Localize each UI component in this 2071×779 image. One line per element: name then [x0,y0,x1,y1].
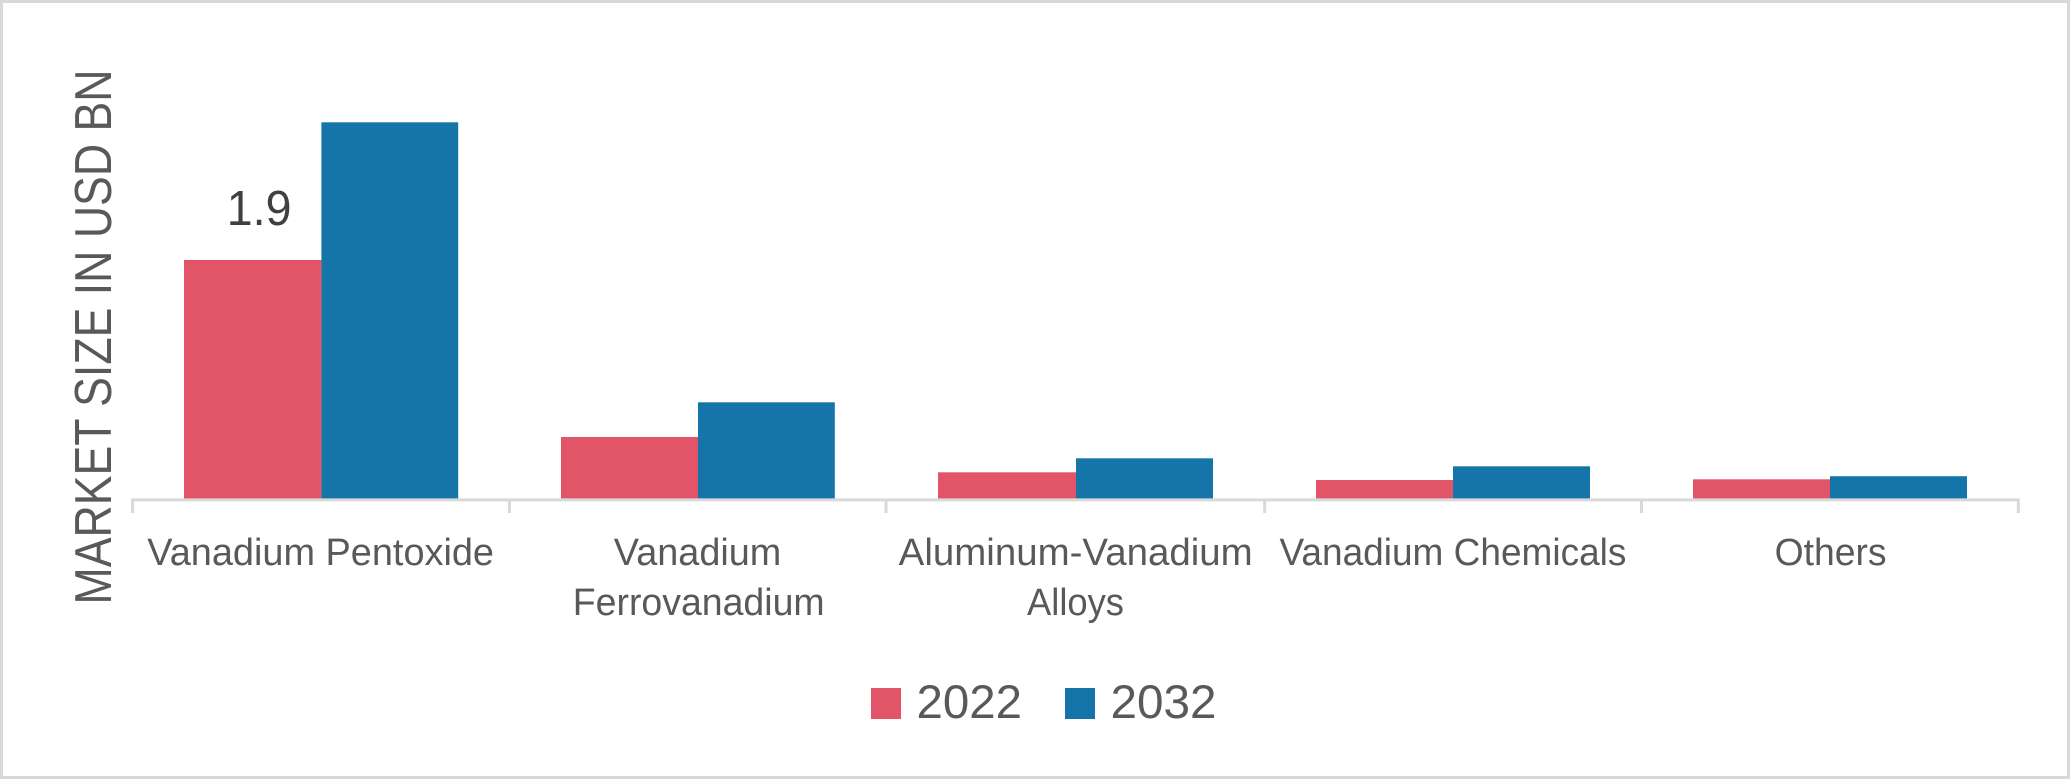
bar chart [133,122,2018,513]
label: Aluminum-Vanadium Alloys: Aluminum-Vanadium [899,532,1253,574]
data label: 1.9 [227,182,292,236]
bars: Aluminum-Vanadium Alloys [938,458,1213,499]
category labels [147,532,1887,624]
legend item: 2022 [871,675,1022,728]
label: Vanadium Ferrovanadium: Ferrovanadium [573,582,825,624]
bars: Others [1693,476,1967,499]
bars: Vanadium Pentoxide [184,122,458,499]
label: Vanadium Ferrovanadium [573,532,825,624]
legend item: 2022: 2022 [916,675,1022,728]
legend item: 2032 [1065,675,1216,728]
label: Vanadium Ferrovanadium: Vanadium [614,532,781,574]
bars: Vanadium Chemicals [1316,466,1590,499]
x-axis line and ticks [133,500,2018,513]
legend [871,675,1216,728]
label: Vanadium Chemicals: Vanadium Chemicals [1280,532,1626,574]
label: Aluminum-Vanadium Alloys [899,532,1253,624]
legend item: 2032: 2032 [1110,675,1216,728]
label: Vanadium Pentoxide: Vanadium Pentoxide [147,532,494,574]
label: Aluminum-Vanadium Alloys: Alloys [1027,582,1124,624]
label: Others: Others [1775,532,1887,574]
bars: Vanadium Ferrovanadium [561,402,835,499]
y-axis title: MARKET SIZE IN USD BN [65,70,123,604]
